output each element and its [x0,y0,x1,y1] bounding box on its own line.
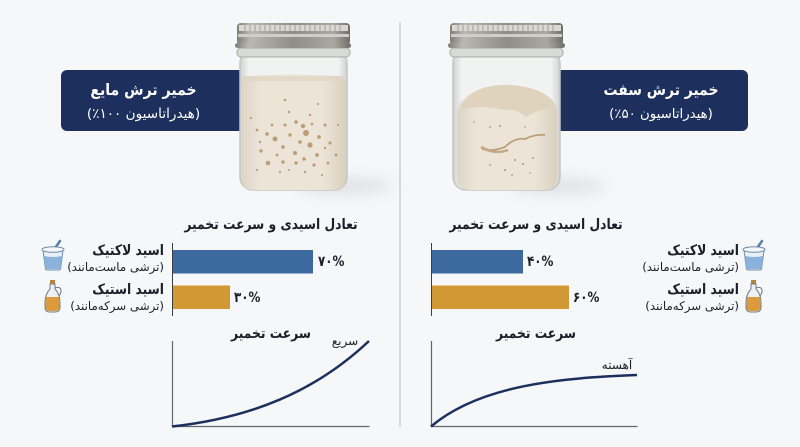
acetic acid label: اسید استیک [92,282,164,298]
bar chart: acids: ۷۰% [318,254,344,270]
label: stiff starter: خمیر ترش سفت [603,81,719,99]
line chart: fast fermentation: سریع [332,334,358,349]
label: liquid starter [61,70,246,131]
line chart: slow fermentation [431,341,638,426]
label: stiff starter: (هیدراتاسیون ۵۰٪) [609,107,713,122]
icon: yogurt cup [42,241,64,270]
jar photo: stiff starter [448,23,565,190]
lactic acid label [642,243,739,275]
label: stiff starter [555,70,748,131]
panel: liquid starter (left column) [42,23,393,426]
lactic acid label: اسید لاکتیک [667,243,739,259]
bar chart: acids [431,243,599,316]
bar chart: acids: ۳۰% [234,290,260,306]
lactic acid label: اسید لاکتیک [92,243,164,259]
icon: yogurt cup [743,241,765,270]
heading: fermentation speed: سرعت تخمیر [230,326,311,342]
icon: vinegar bottle [45,280,61,312]
bar chart: acids [172,243,344,316]
center divider [400,22,401,427]
jar photo: liquid starter [235,23,351,190]
label: liquid starter: (هیدراتاسیون ۱۰۰٪) [87,106,200,122]
acetic acid label: (ترشی سرکه‌مانند) [645,299,739,314]
panel: stiff starter (right column) [431,23,765,426]
line chart: slow fermentation: آهسته [602,357,633,372]
jar shadow [297,178,393,194]
heading: fermentation speed: سرعت تخمیر [495,326,576,342]
line chart: fast fermentation [172,334,370,426]
acetic acid label [70,282,164,314]
acetic acid label: اسید استیک [667,282,739,298]
bar chart: acids: ۶۰% [573,290,599,306]
bar chart: acids: ۴۰% [527,254,553,270]
lactic acid label: (ترشی ماست‌مانند) [642,260,739,275]
lactic acid label [67,243,164,275]
acetic acid label [645,282,739,314]
jar shadow [510,178,606,194]
heading: acid balance: تعادل اسیدی و سرعت تخمیر [183,217,358,233]
heading: acid balance: تعادل اسیدی و سرعت تخمیر [448,217,623,233]
lactic acid label: (ترشی ماست‌مانند) [67,260,164,275]
icon: vinegar bottle [746,280,762,312]
label: liquid starter: خمیر ترش مایع [90,81,197,99]
acetic acid label: (ترشی سرکه‌مانند) [70,299,164,314]
